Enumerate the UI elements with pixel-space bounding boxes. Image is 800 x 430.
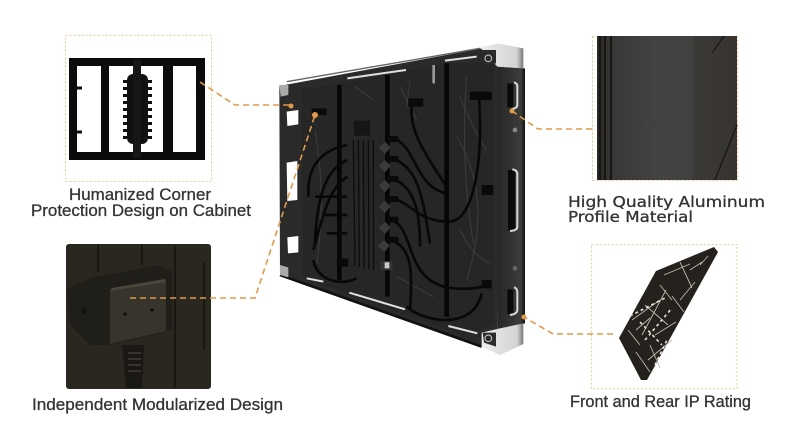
cabinet front face	[279, 48, 498, 347]
heat sink	[347, 103, 378, 271]
icon: bracket close-up	[67, 265, 172, 388]
heading: aluminum profile: Profile Material	[568, 208, 693, 226]
heading: corner protection: Protection Design on Cabinet	[31, 201, 251, 220]
side face	[497, 67, 525, 329]
module ribs	[315, 77, 490, 297]
cables right	[392, 98, 484, 320]
heading: corner protection: Humanized Corner	[69, 185, 211, 204]
brackets	[312, 92, 493, 288]
indicators	[513, 128, 517, 132]
icon: cabinet frame	[69, 58, 205, 160]
arrow: aluminum profile leader	[510, 108, 592, 129]
white rails	[307, 57, 477, 333]
panel: corner protection photo	[66, 36, 212, 182]
side handles	[507, 83, 515, 314]
heading: IP rating: Front and Rear IP Rating	[570, 392, 751, 411]
illustration: LED cabinet rear view	[279, 43, 525, 355]
arrow: IP rating leader	[522, 314, 613, 334]
arrow: corner protection leader	[200, 82, 294, 108]
heading: modular design: Independent Modularized Design	[32, 395, 283, 414]
silver corners	[480, 43, 523, 68]
panel: aluminum profile photo	[592, 36, 738, 180]
connectors	[378, 142, 391, 252]
frame rails	[339, 63, 447, 317]
cables left	[308, 145, 357, 282]
heading: aluminum profile: High Quality Aluminum	[568, 193, 765, 211]
panel: IP rating photo	[592, 244, 737, 389]
arrow: modular design leader	[130, 112, 318, 298]
window cut-outs	[287, 110, 298, 253]
icon: marble LED panel	[619, 247, 718, 380]
connector plugs	[387, 136, 399, 243]
panel: modular design photo	[66, 244, 211, 389]
